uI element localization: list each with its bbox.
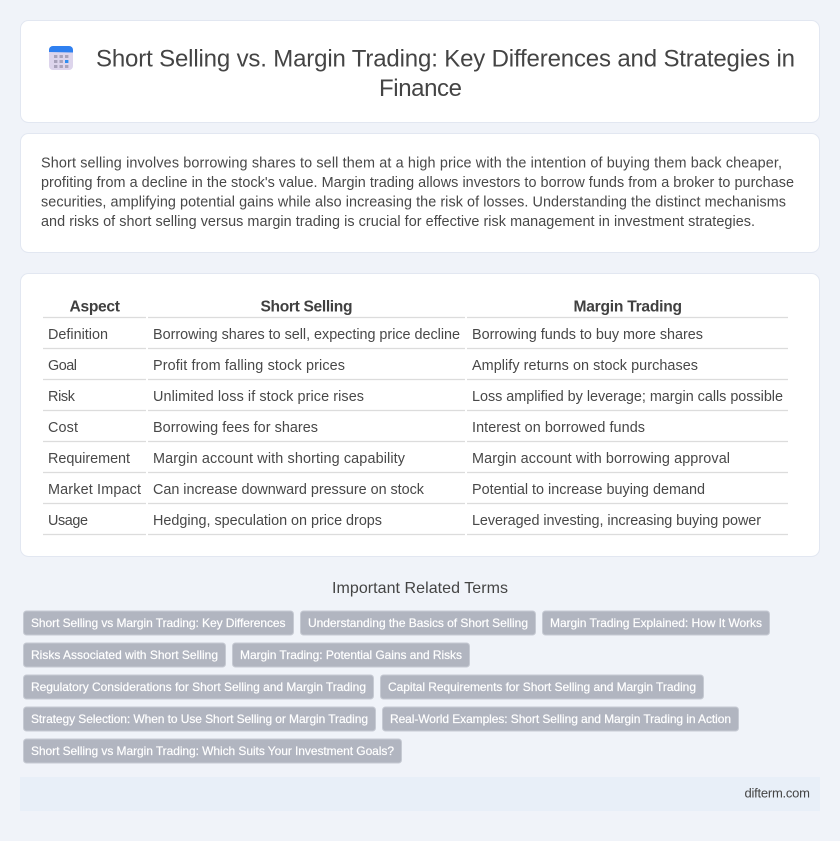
- row: risk: Unlimited loss if stock price rises: [153, 389, 364, 405]
- row: cost: Borrowing fees for shares: [153, 420, 318, 436]
- row: goal: Goal: [48, 358, 77, 374]
- tag: strategy selection: Strategy Selection: When to Use Short Selling or Margin Trading: [31, 712, 368, 726]
- row: definition: Borrowing funds to buy more shares: [472, 327, 703, 343]
- table header row: Short Selling: [260, 298, 352, 316]
- intro text: [41, 156, 794, 230]
- related term tags: [24, 611, 770, 763]
- row: definition: Definition: [48, 327, 108, 343]
- row: goal: [43, 358, 788, 380]
- row: cost: Interest on borrowed funds: [472, 420, 645, 436]
- footer site name: difterm.com: [744, 786, 810, 800]
- row: risk: [43, 389, 788, 410]
- tag: risks of short selling: Risks Associated with Short Selling: [31, 648, 218, 662]
- row: goal: Profit from falling stock prices: [153, 358, 345, 374]
- title: Finance: [379, 75, 462, 102]
- row: market impact: [43, 482, 788, 504]
- row: cost: [43, 420, 788, 442]
- icon: calendar: [49, 46, 73, 70]
- row: usage: Hedging, speculation on price drops: [153, 513, 382, 529]
- row: cost: Cost: [48, 420, 78, 436]
- tag: real-world examples: Real-World Examples: Short Selling and Margin Trading in Action: [390, 712, 731, 726]
- row: market impact: Potential to increase buying demand: [472, 482, 705, 498]
- table header row: Aspect: [70, 298, 120, 316]
- row: definition: [43, 327, 788, 348]
- row: goal: Amplify returns on stock purchases: [472, 358, 698, 374]
- table header row: Margin Trading: [574, 298, 682, 316]
- panel: introduction: [20, 134, 820, 252]
- title: [96, 46, 795, 102]
- intro text: profiting from a decline in the stock's value. Margin trading allows investors to borrow funds from a broker to purchase: [41, 175, 794, 191]
- tag: basics of short selling: Understanding the Basics of Short Selling: [308, 616, 528, 630]
- intro text: Short selling involves borrowing shares to sell them at a high price with the intention of buying them back cheaper,: [41, 156, 782, 172]
- intro text: and risks of short selling versus margin trading is crucial for effective risk management in investment strategies.: [41, 214, 755, 230]
- row: market impact: Market Impact: [48, 482, 141, 498]
- row: usage: [43, 513, 788, 534]
- row: usage: Leveraged investing, increasing buying power: [472, 513, 761, 529]
- panel: comparison table: [20, 274, 820, 556]
- footer: [20, 777, 820, 811]
- row: risk: Loss amplified by leverage; margin calls possible: [472, 389, 783, 405]
- heading: related terms: Important Related Terms: [332, 580, 508, 597]
- row: requirement: Margin account with shorting capability: [153, 451, 406, 467]
- tag: margin trading explained: Margin Trading Explained: How It Works: [550, 616, 762, 630]
- tag: key differences: Short Selling vs Margin Trading: Key Differences: [31, 616, 286, 630]
- row: risk: Risk: [48, 389, 76, 405]
- tag: investment goals: Short Selling vs Margin Trading: Which Suits Your Investment Goals?: [31, 744, 394, 758]
- row: usage: Usage: [48, 513, 88, 529]
- table header row: [43, 298, 788, 318]
- row: requirement: Margin account with borrowing approval: [472, 451, 730, 467]
- tag: potential gains and risks: Margin Trading: Potential Gains and Risks: [240, 648, 462, 662]
- intro text: securities, amplifying potential gains while also increasing the risk of losses. Understanding the distinct mechanisms: [41, 194, 786, 210]
- row: market impact: Can increase downward pressure on stock: [153, 482, 425, 498]
- tag: regulatory considerations: Regulatory Considerations for Short Selling and Margin Trading: [31, 680, 366, 694]
- tag: capital requirements: Capital Requirements for Short Selling and Margin Trading: [388, 680, 696, 694]
- row: definition: Borrowing shares to sell, expecting price decline: [153, 327, 460, 343]
- title: Short Selling vs. Margin Trading: Key Differences and Strategies in: [96, 46, 795, 72]
- row: requirement: Requirement: [48, 451, 130, 467]
- row: requirement: [43, 451, 788, 472]
- panel: header: [20, 20, 820, 122]
